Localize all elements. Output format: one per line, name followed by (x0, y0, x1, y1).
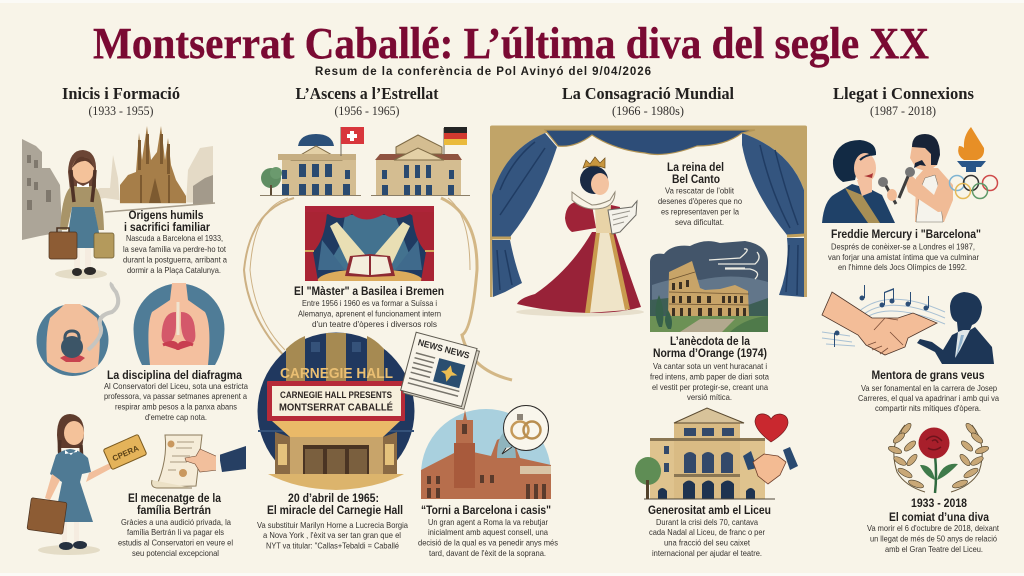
icon: handshake (743, 447, 798, 484)
icon: Caballé and Freddie Mercury singing (822, 134, 953, 223)
text: Mentora de grans veus: compartir nits mítiques d'òpera. (875, 403, 981, 413)
image: stage with book and spotlights (305, 206, 434, 281)
icon: young girl with suitcases (49, 150, 114, 279)
icon: Italian cityscape (421, 409, 551, 499)
panel: Inicis i Formació (22, 84, 248, 558)
text: Mentora de grans veus (858, 370, 999, 413)
text: Freddie Mercury i Barcelona: Freddie Mercury i "Barcelona" (831, 229, 981, 241)
text: El Màster a Basilea i Bremen: Entre 1956 i 1960 es va formar a Suïssa i (302, 298, 437, 308)
text: L'anècdota de la Norma d'Orange: Norma d’Orange (1974) (653, 348, 767, 360)
text: Torni a Barcelona i casis: decisió de la qual es va penedir anys més (418, 538, 558, 548)
icon: heart (755, 414, 788, 442)
text: La reina del Bel Canto: es representaven per la (661, 206, 739, 216)
text: Mentora de grans veus: Carreres, el qual va apadrinar i amb qui va (858, 393, 999, 403)
icon: Liceu theatre with tree (635, 408, 775, 499)
text: L'anècdota de la Norma d'Orange: L’anècdota de la (670, 336, 751, 348)
heading: L'Ascens a l'Estrellat: (1956 - 1965) (334, 104, 400, 118)
icon: Olympic flame and rings (950, 127, 998, 198)
text: El mecenatge: família Bertrán li va pagar els (127, 527, 224, 537)
text: Freddie Mercury i Barcelona: Després de conèixer-se a Londres el 1987, (831, 242, 975, 252)
text: El mecenatge: estudis al Conservatori en veure el (118, 538, 233, 548)
text: La reina del Bel Canto (658, 162, 742, 227)
text: El comiat d'una diva: El comiat d’una diva (889, 512, 990, 524)
heading: La Consagració Mundial (562, 84, 734, 118)
icon: opera ticket (103, 434, 147, 470)
text: L'anècdota de la Norma d'Orange: el vestit per protegir-se, creant una (652, 382, 768, 392)
text: La reina del Bel Canto: La reina del (667, 162, 724, 174)
text: Generositat amb el Liceu: una fracció del seu caixet (664, 538, 751, 548)
text: Origens humils: Origens humils (128, 210, 204, 222)
text: Mentora de grans veus: Va ser fonamental en la carrera de Josep (861, 383, 997, 393)
heading: Llegat i Connexions (833, 84, 974, 118)
text: 20 d'abril de 1965 (257, 493, 408, 550)
text: Torni a Barcelona i casis: tard, davant de l'èxit de la soprana. (429, 548, 546, 558)
text: La disciplina del diafragma: La disciplina del diafragma (107, 370, 243, 382)
title: Montserrat Caballé: L’última diva del segle XX (93, 19, 929, 68)
icon: chest with lungs (134, 283, 224, 365)
text: El comiat d'una diva: 1933 - 2018 (911, 498, 968, 510)
icon: queen in red gown (516, 157, 644, 316)
icon: speech bubble with wedding rings (502, 406, 548, 454)
text: Generositat amb el Liceu: cada Nadal al Liceu, de franc o per (649, 527, 765, 537)
text: El mecenatge: família Bertrán (137, 505, 211, 517)
text: Torni a Barcelona i casis: “Torni a Barcelona i casis" (421, 505, 551, 517)
icon: laurel wreath with red rose (887, 422, 990, 493)
illustration: stage frame with blue curtains (490, 126, 807, 297)
heading: L'Ascens a l'Estrellat (296, 84, 439, 118)
text: Generositat amb el Liceu: Generositat amb el Liceu (648, 505, 771, 517)
icon: Bremen opera house with German flag (371, 127, 470, 196)
icon: opera ticket: CPERA (111, 443, 140, 463)
text: Origens humils: durant la postguerra, arribant a (123, 254, 227, 264)
text: Origens humils: Nascuda a Barcelona el 1933, (126, 233, 223, 243)
text: La reina del Bel Canto: Va rescatar de l'oblit (665, 186, 735, 196)
text: El mecenatge: Gràcies a una audició privada, la (121, 517, 231, 527)
text: L'anècdota de la Norma d'Orange: Va cantar sota un vent huracanat i (653, 361, 767, 371)
illustration: ruined city and Sagrada Família (22, 126, 215, 240)
text: La disciplina del diafragma (104, 370, 248, 422)
heading: Inicis i Formació: Inicis i Formació (62, 84, 180, 103)
text: La reina del Bel Canto: seva dificultat. (675, 217, 724, 227)
text: La disciplina del diafragma: d'emetre cap nota. (145, 412, 207, 422)
text: Generositat amb el Liceu: internacional per ajudar el teatre. (652, 548, 762, 558)
image: Colosseum under a storm (650, 241, 768, 332)
icon: newspaper: NEWS NEWS (417, 337, 471, 361)
heading: Inicis i Formació (62, 84, 180, 118)
text: Freddie Mercury i Barcelona (828, 229, 981, 272)
heading: Inicis i Formació: (1933 - 1955) (88, 104, 154, 118)
subtitle: Resum de la conferència de Pol Avinyó del 9/04/2026 (315, 66, 651, 78)
icon: chest with kettlebell weight (36, 283, 118, 376)
icon: patron's hand with sleeve (185, 446, 246, 472)
heading: L'Ascens a l'Estrellat: L’Ascens a l’Estrellat (296, 84, 439, 103)
icon: Carnegie Hall marquee: CARNEGIE HALL PRESENTS (280, 390, 392, 401)
icon: Carnegie Hall marquee: MONTSERRAT CABALLÉ (279, 400, 393, 414)
text: El mecenatge (118, 493, 233, 558)
text: Mentora de grans veus: Mentora de grans veus (872, 370, 984, 382)
text: 20 d'abril de 1965: NYT va titular: "Callas+Tebaldi = Caballé (266, 540, 399, 550)
text: L'anècdota de la Norma d'Orange: versió mítica. (687, 392, 732, 402)
text: L'anècdota de la Norma d'Orange: fred intens, amb paper de diari sota (650, 372, 769, 382)
text: Torni a Barcelona i casis (418, 505, 558, 558)
text: Origens humils: i sacrifici familiar (124, 222, 210, 234)
icon: Basel opera house with Swiss flag (260, 127, 364, 196)
text: El comiat d'una diva: un llegat de més de 50 anys de relació (870, 534, 997, 544)
text: Freddie Mercury i Barcelona: van forjar una amistat íntima que va culminar (828, 252, 979, 262)
text: El Màster a Basilea i Bremen (294, 286, 444, 329)
text: La reina del Bel Canto: desenes d'òperes que no (658, 196, 742, 206)
text: Generositat amb el Liceu (648, 505, 771, 558)
text: El mecenatge: El mecenatge de la (128, 493, 222, 505)
heading: Llegat i Connexions: Llegat i Connexions (833, 84, 974, 103)
text: El Màster a Basilea i Bremen: El "Màster" a Basilea i Bremen (294, 286, 444, 298)
text: Origens humils: dormir a la Plaça Catalunya. (127, 265, 221, 275)
panel: L'Ascens a l'Estrellat (244, 84, 558, 558)
text: El comiat d'una diva: Va morir el 6 d'octubre de 2018, deixant (867, 523, 1000, 533)
icon: schoolgirl holding opera ticket (27, 414, 112, 555)
text: Origens humils (123, 210, 227, 275)
text: Torni a Barcelona i casis: inicialment amb aquest consell, una (428, 527, 548, 537)
text: Freddie Mercury i Barcelona: en l'himne dels Jocs Olímpics de 1992. (838, 262, 967, 272)
heading: La Consagració Mundial: La Consagració Mundial (562, 84, 734, 103)
text: Generositat amb el Liceu: Durant la crisi dels 70, cantava (656, 517, 758, 527)
text: 20 d'abril de 1965: 20 d’abril de 1965: (288, 493, 379, 505)
text: El mecenatge: seu potencial excepcional (132, 548, 219, 558)
text: El comiat d'una diva: amb el Gran Teatre del Liceu. (885, 544, 983, 554)
heading: La Consagració Mundial: (1966 - 1980s) (612, 104, 684, 118)
decorative music ribbon (244, 198, 512, 380)
icon: newspaper (400, 332, 480, 409)
panel: La Consagració Mundial (490, 84, 807, 558)
text: L'anècdota de la Norma d'Orange (650, 336, 769, 402)
text: 20 d'abril de 1965: Va substituir Marilyn Horne a Lucrecia Borgia (257, 520, 408, 530)
text: 20 d'abril de 1965: El miracle del Carnegie Hall (267, 505, 403, 517)
panel: Llegat i Connexions (822, 84, 1000, 554)
text: La reina del Bel Canto: Bel Canto (672, 174, 720, 186)
text: El comiat d'una diva (867, 498, 1000, 554)
text: La disciplina del diafragma: Al Conservatori del Liceu, sota una estricta (104, 381, 248, 391)
icon: Carnegie Hall marquee (258, 332, 414, 490)
text: La disciplina del diafragma: respirar amb pesos a la panxa abans (115, 402, 237, 412)
text: El Màster a Basilea i Bremen: Alemanya, aprenent el funcionament intern (298, 308, 441, 318)
heading: Llegat i Connexions: (1987 - 2018) (870, 104, 936, 118)
icon: scroll contract (152, 435, 202, 488)
text: Torni a Barcelona i casis: Un gran agent a Roma la va rebutjar (428, 517, 548, 527)
text: 20 d'abril de 1965: a Nova York , l'èxit va ser tan gran que el (263, 530, 401, 540)
text: El Màster a Basilea i Bremen: d'un teatre d'òperes i diversos rols (312, 319, 437, 329)
text: La disciplina del diafragma: professora, va passar setmanes aprenent a (104, 391, 247, 401)
icon: notes, handshake and silhouette (822, 285, 994, 364)
text: Origens humils: la seva família va perdre-ho tot (123, 244, 227, 254)
icon: Carnegie Hall marquee: CARNEGIE HALL (280, 365, 393, 382)
